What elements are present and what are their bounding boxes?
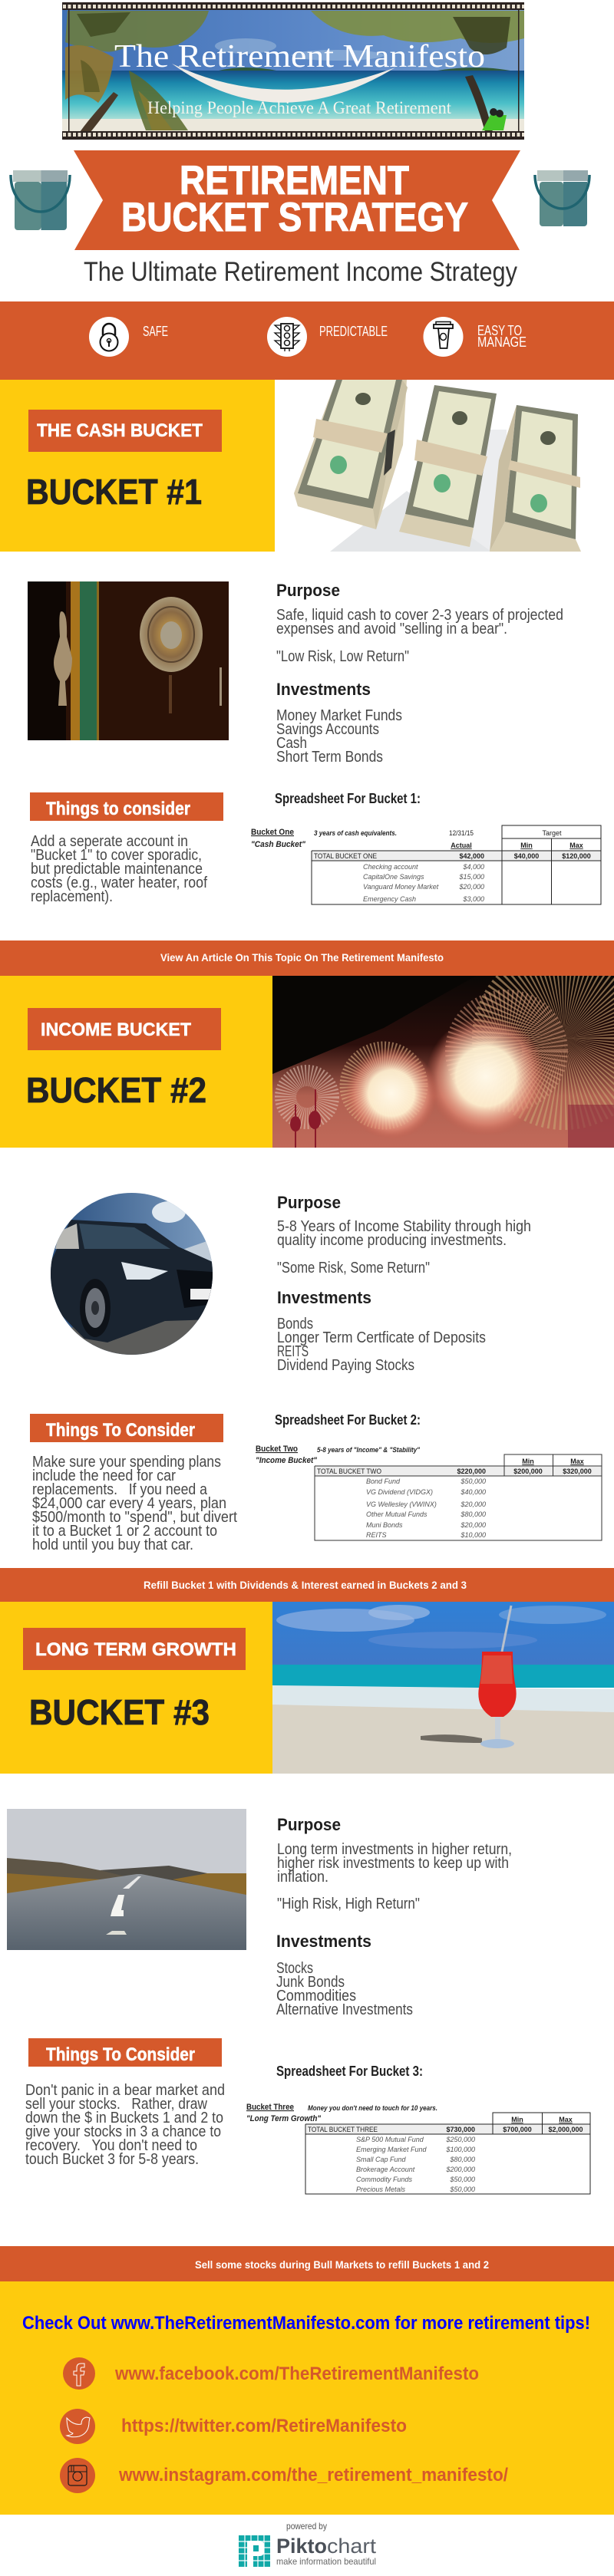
label: safe: SAFE [143,324,168,339]
heading: bucket 2: BUCKET #2 [26,1070,206,1110]
table: bucket 2 spreadsheet: VG Wellesley (VWINX) [366,1500,437,1508]
callout: bucket 3 things to consider: Don't panic in a bear market and [25,2082,225,2099]
panel: bucket 3 hero [0,1602,614,1774]
table: bucket 3 spreadsheet: $80,000 [449,2156,475,2163]
photo: car [51,1193,213,1356]
callout: bucket 1 things to consider: costs (e.g., water heater, roof [31,875,207,891]
table: bucket 2 spreadsheet: Bond Fund [366,1477,401,1485]
table: bucket 2 spreadsheet: Muni Bonds [366,1521,403,1529]
text block: bucket 3 purpose and investments: Purpose [277,1815,341,1834]
table: bucket 1 spreadsheet: $3,000 [462,895,484,903]
text block: bucket 2 purpose and investments: Dividend Paying Stocks [277,1357,414,1374]
table: bucket 2 spreadsheet: Max [570,1458,584,1465]
table: bucket 1 spreadsheet: Emergency Cash [363,895,416,903]
table: bucket 2 spreadsheet: 5-8 years of "Income" & "Stability" [317,1446,421,1454]
tag: the cash bucket [28,410,222,452]
text block: bucket 2 purpose and investments: Investments [277,1288,371,1307]
table: bucket 2 spreadsheet: $20,000 [460,1521,486,1529]
table: bucket 3 spreadsheet [246,2103,590,2194]
banner: view article: View An Article On This Topic On The Retirement Manifesto [160,951,444,964]
callout: bucket 3 things to consider: touch Bucket 3 for 5-8 years. [25,2151,199,2168]
text block: bucket 3 purpose and investments: "High Risk, High Return" [277,1896,420,1912]
banner: sell some stocks: Sell some stocks during Bull Markets to refill Buckets 1 and 2 [195,2258,489,2271]
subtitle: The Ultimate Retirement Income Strategy [84,257,517,287]
footer: powered by piktochart: make information beautiful [276,2556,376,2567]
table: bucket 3 spreadsheet: Money you don't need to touch for 10 years. [308,2104,437,2112]
callout: bucket 2 things to consider [30,1414,237,1553]
text block: bucket 3 purpose and investments: Alternative Investments [276,2001,413,2018]
table: bucket 3 spreadsheet: $700,000 [503,2126,532,2133]
icon: cup [424,317,464,357]
table: bucket 1 spreadsheet: Bucket One [251,828,294,837]
text block: bucket 3 purpose and investments: Junk Bonds [276,1974,345,1991]
text block: bucket 2 purpose and investments: REITS [277,1343,309,1360]
table: bucket 3 spreadsheet: S&P 500 Mutual Fund [356,2136,424,2143]
table: bucket 2 spreadsheet: $20,000 [460,1500,486,1508]
text block: bucket 2 purpose and investments: quality income producing investments. [277,1232,507,1249]
table: bucket 2 spreadsheet: Other Mutual Funds [366,1510,427,1518]
table: bucket 3 spreadsheet: $250,000 [445,2136,475,2143]
table: bucket 3 spreadsheet: "Long Term Growth" [246,2114,322,2123]
footer: powered by piktochart [239,2521,377,2567]
table: bucket 2 spreadsheet: $320,000 [563,1468,592,1475]
banner: refill bucket 1: Refill Bucket 1 with Dividends & Interest earned in Buckets 2 and 3 [144,1579,467,1591]
link: instagram: www.instagram.com/the_retirement_manifesto/ [118,2465,508,2485]
text block: bucket 1 purpose and investments [276,581,563,766]
callout: bucket 2 things to consider: hold until you buy that car. [32,1537,193,1553]
callout: bucket 2 things to consider: it to a Bucket 1 or 2 account to [32,1523,217,1540]
heading: bucket 1: BUCKET #1 [26,472,202,512]
callout: bucket 1 things to consider: Add a seperate account in [31,833,188,850]
label: easy to manage: EASY TO [477,323,522,338]
table: bucket 3 spreadsheet: $200,000 [445,2166,475,2173]
table: bucket 1 spreadsheet: TOTAL BUCKET ONE [314,852,377,860]
text block: bucket 3 purpose and investments [276,1815,512,2018]
heading: spreadsheet 2: Spreadsheet For Bucket 2: [275,1412,421,1428]
table: bucket 3 spreadsheet: $50,000 [449,2176,475,2183]
text block: bucket 1 purpose and investments: "Low Risk, Low Return" [276,648,409,665]
text block: bucket 1 purpose and investments: Cash [276,735,307,752]
callout: bucket 3 things to consider [25,2038,225,2168]
text block: bucket 3 purpose and investments: Investments [276,1932,371,1951]
table: bucket 1 spreadsheet: $42,000 [459,852,484,860]
table: bucket 1 spreadsheet: Actual [451,842,472,849]
link: facebook: www.facebook.com/TheRetirementManifesto [114,2364,479,2384]
table: bucket 2 spreadsheet: $80,000 [460,1510,486,1518]
table: bucket 1 spreadsheet: 3 years of cash equivalents. [314,829,397,837]
text block: bucket 2 purpose and investments: 5-8 Years of Income Stability through high [277,1218,531,1235]
header banner: The Retirement Manifesto [62,2,524,140]
table: bucket 2 spreadsheet: $40,000 [460,1488,486,1496]
table: bucket 3 spreadsheet: Max [559,2116,573,2123]
callout: bucket 2 things to consider: Make sure your spending plans [32,1454,221,1471]
text block: bucket 2 purpose and investments: Purpose [277,1193,341,1212]
icon: lock [89,317,129,357]
table: bucket 2 spreadsheet: $200,000 [513,1468,543,1475]
table: bucket 2 spreadsheet: TOTAL BUCKET TWO [317,1468,381,1475]
callout: bucket 1 things to consider: Things to consider [46,799,190,819]
callout: bucket 3 things to consider: Things To Consider [46,2044,195,2065]
table: bucket 1 spreadsheet: $4,000 [462,863,484,871]
icon: right bucket [535,170,589,226]
banner title: The Retirement Manifesto [114,39,485,74]
table: bucket 3 spreadsheet: Commodity Funds [356,2176,413,2183]
table: bucket 1 spreadsheet: Max [569,842,583,849]
table: bucket 2 spreadsheet: VG Dividend (VIDGX) [366,1488,433,1496]
callout: bucket 2 things to consider: $500/month to "spend", but divert [32,1509,237,1526]
table: bucket 3 spreadsheet: Small Cap Fund [356,2156,407,2163]
panel: footer links [0,2281,614,2515]
tag: the cash bucket: THE CASH BUCKET [37,420,203,441]
table: bucket 1 spreadsheet [251,825,601,904]
table: bucket 3 spreadsheet: $730,000 [446,2126,475,2133]
text block: bucket 1 purpose and investments: Purpose [276,581,340,600]
table: bucket 2 spreadsheet: Min [522,1458,534,1465]
panel: bucket 1 hero [0,380,581,552]
footer: powered by piktochart: Pikto [276,2535,327,2558]
table: bucket 2 spreadsheet: $220,000 [457,1468,486,1475]
heading: spreadsheet 1: Spreadsheet For Bucket 1: [275,791,421,806]
banner: sell some stocks [0,2246,614,2281]
table: bucket 1 spreadsheet: $40,000 [514,852,539,860]
icon: traffic light [267,317,307,357]
table: bucket 3 spreadsheet: Precious Metals [356,2186,406,2193]
callout: bucket 3 things to consider: recovery. You don't need to [25,2137,197,2154]
banner tagline: Helping People Achieve A Great Retirement [147,98,452,117]
callout: bucket 3 things to consider: down the $ in Buckets 1 and 2 to [25,2110,223,2126]
table: bucket 3 spreadsheet: Min [511,2116,523,2123]
table: bucket 1 spreadsheet: Min [520,842,533,849]
text block: bucket 1 purpose and investments: Savings Accounts [276,721,379,738]
callout: bucket 1 things to consider: replacement). [31,888,113,905]
icon: facebook [63,2357,95,2390]
table: bucket 3 spreadsheet: Bucket Three [246,2103,294,2112]
table: bucket 3 spreadsheet: TOTAL BUCKET THREE [308,2126,378,2133]
title ribbon [74,150,520,250]
table: bucket 2 spreadsheet: REITS [366,1531,387,1539]
table: bucket 1 spreadsheet: Vanguard Money Market [363,883,439,891]
table: bucket 2 spreadsheet: $50,000 [460,1477,486,1485]
icon: left bucket [11,170,70,230]
heading: spreadsheet 3: Spreadsheet For Bucket 3: [276,2064,423,2079]
table: bucket 1 spreadsheet: "Cash Bucket" [251,840,306,849]
title line 2: BUCKET STRATEGY [121,195,468,240]
table: bucket 3 spreadsheet: Brokerage Account [356,2166,415,2173]
callout: bucket 2 things to consider: replacements. If you need a [32,1481,208,1498]
callout: bucket 1 things to consider [30,792,223,905]
table: bucket 3 spreadsheet: $50,000 [449,2186,475,2193]
photo: drink on the beach [272,1602,614,1774]
banner: view article [0,940,614,976]
icon: twitter [60,2409,95,2444]
panel: feature band [0,301,614,380]
icon: instagram [60,2458,95,2493]
text block: bucket 1 purpose and investments: Safe, liquid cash to cover 2-3 years of projected [276,607,563,624]
callout: bucket 2 things to consider: Things To Consider [46,1420,195,1441]
table: bucket 1 spreadsheet: $120,000 [562,852,591,860]
text block: bucket 3 purpose and investments: Long term investments in higher return, [277,1841,512,1858]
link: twitter: https://twitter.com/RetireManifesto [121,2416,407,2436]
text block: bucket 1 purpose and investments: Money Market Funds [276,707,402,724]
table: bucket 1 spreadsheet: $15,000 [458,873,484,881]
table: bucket 2 spreadsheet: "Income Bucket" [256,1456,318,1465]
text block: bucket 1 purpose and investments: expenses and avoid "selling in a bear". [276,621,507,637]
footer: powered by piktochart: chart [327,2535,377,2558]
table: bucket 1 spreadsheet: CapitalOne Savings [363,873,424,881]
label: easy to manage [477,323,527,350]
text block: bucket 3 purpose and investments: higher risk investments to keep up with [277,1855,509,1872]
text block: bucket 1 purpose and investments: Investments [276,680,371,699]
table: bucket 3 spreadsheet: Emerging Market Fund [356,2146,427,2153]
table: bucket 2 spreadsheet [256,1444,602,1540]
photo: road [7,1809,246,1950]
text block: bucket 2 purpose and investments: "Some Risk, Some Return" [277,1260,430,1276]
photo: safe door [28,581,229,740]
table: bucket 2 spreadsheet: Bucket Two [256,1444,298,1454]
heading: bucket 3: BUCKET #3 [29,1692,210,1732]
panel: bucket 2 hero [0,976,614,1148]
text block: bucket 2 purpose and investments [277,1193,531,1374]
table: bucket 2 spreadsheet: $10,000 [460,1531,486,1539]
callout: bucket 2 things to consider: include the need for car [32,1468,176,1484]
footer: powered by piktochart: powered by [286,2521,327,2532]
text block: bucket 3 purpose and investments: Commodities [276,1988,356,2004]
tag: income bucket [28,1008,221,1050]
callout: bucket 2 things to consider: $24,000 car every 4 years, plan [32,1495,226,1512]
callout: bucket 1 things to consider: "Bucket 1" to cover sporadic, [31,847,202,864]
label: predictable: PREDICTABLE [319,324,388,339]
table: bucket 3 spreadsheet: $2,000,000 [548,2126,583,2133]
callout: bucket 3 things to consider: give your stocks in 3 a chance to [25,2123,221,2140]
callout: bucket 1 things to consider: but predictable maintenance [31,861,203,878]
icon: piktochart logo [239,2535,270,2567]
banner: refill bucket 1 [0,1568,614,1602]
label: easy to manage: MANAGE [477,334,527,350]
tag: long term growth [23,1628,246,1670]
table: bucket 1 spreadsheet: 12/31/15 [449,829,474,837]
text block: bucket 3 purpose and investments: inflation. [277,1869,328,1886]
table: bucket 1 spreadsheet: Checking account [363,863,418,871]
text block: bucket 3 purpose and investments: Stocks [276,1960,313,1977]
photo: fireworks [272,976,614,1148]
title line 1: RETIREMENT [180,158,409,203]
table: bucket 3 spreadsheet: $100,000 [445,2146,475,2153]
photo: stacks of dollar bills [294,380,581,552]
table: bucket 1 spreadsheet: Target [542,829,562,837]
tag: long term growth: LONG TERM GROWTH [35,1639,236,1660]
text block: bucket 1 purpose and investments: Short Term Bonds [276,749,383,766]
table: bucket 1 spreadsheet: $20,000 [458,883,484,891]
text block: bucket 2 purpose and investments: Longer Term Certficate of Deposits [277,1329,486,1346]
tag: income bucket: INCOME BUCKET [41,1020,191,1040]
text block: bucket 2 purpose and investments: Bonds [277,1316,313,1332]
callout: bucket 3 things to consider: sell your stocks. Rather, draw [25,2096,207,2113]
